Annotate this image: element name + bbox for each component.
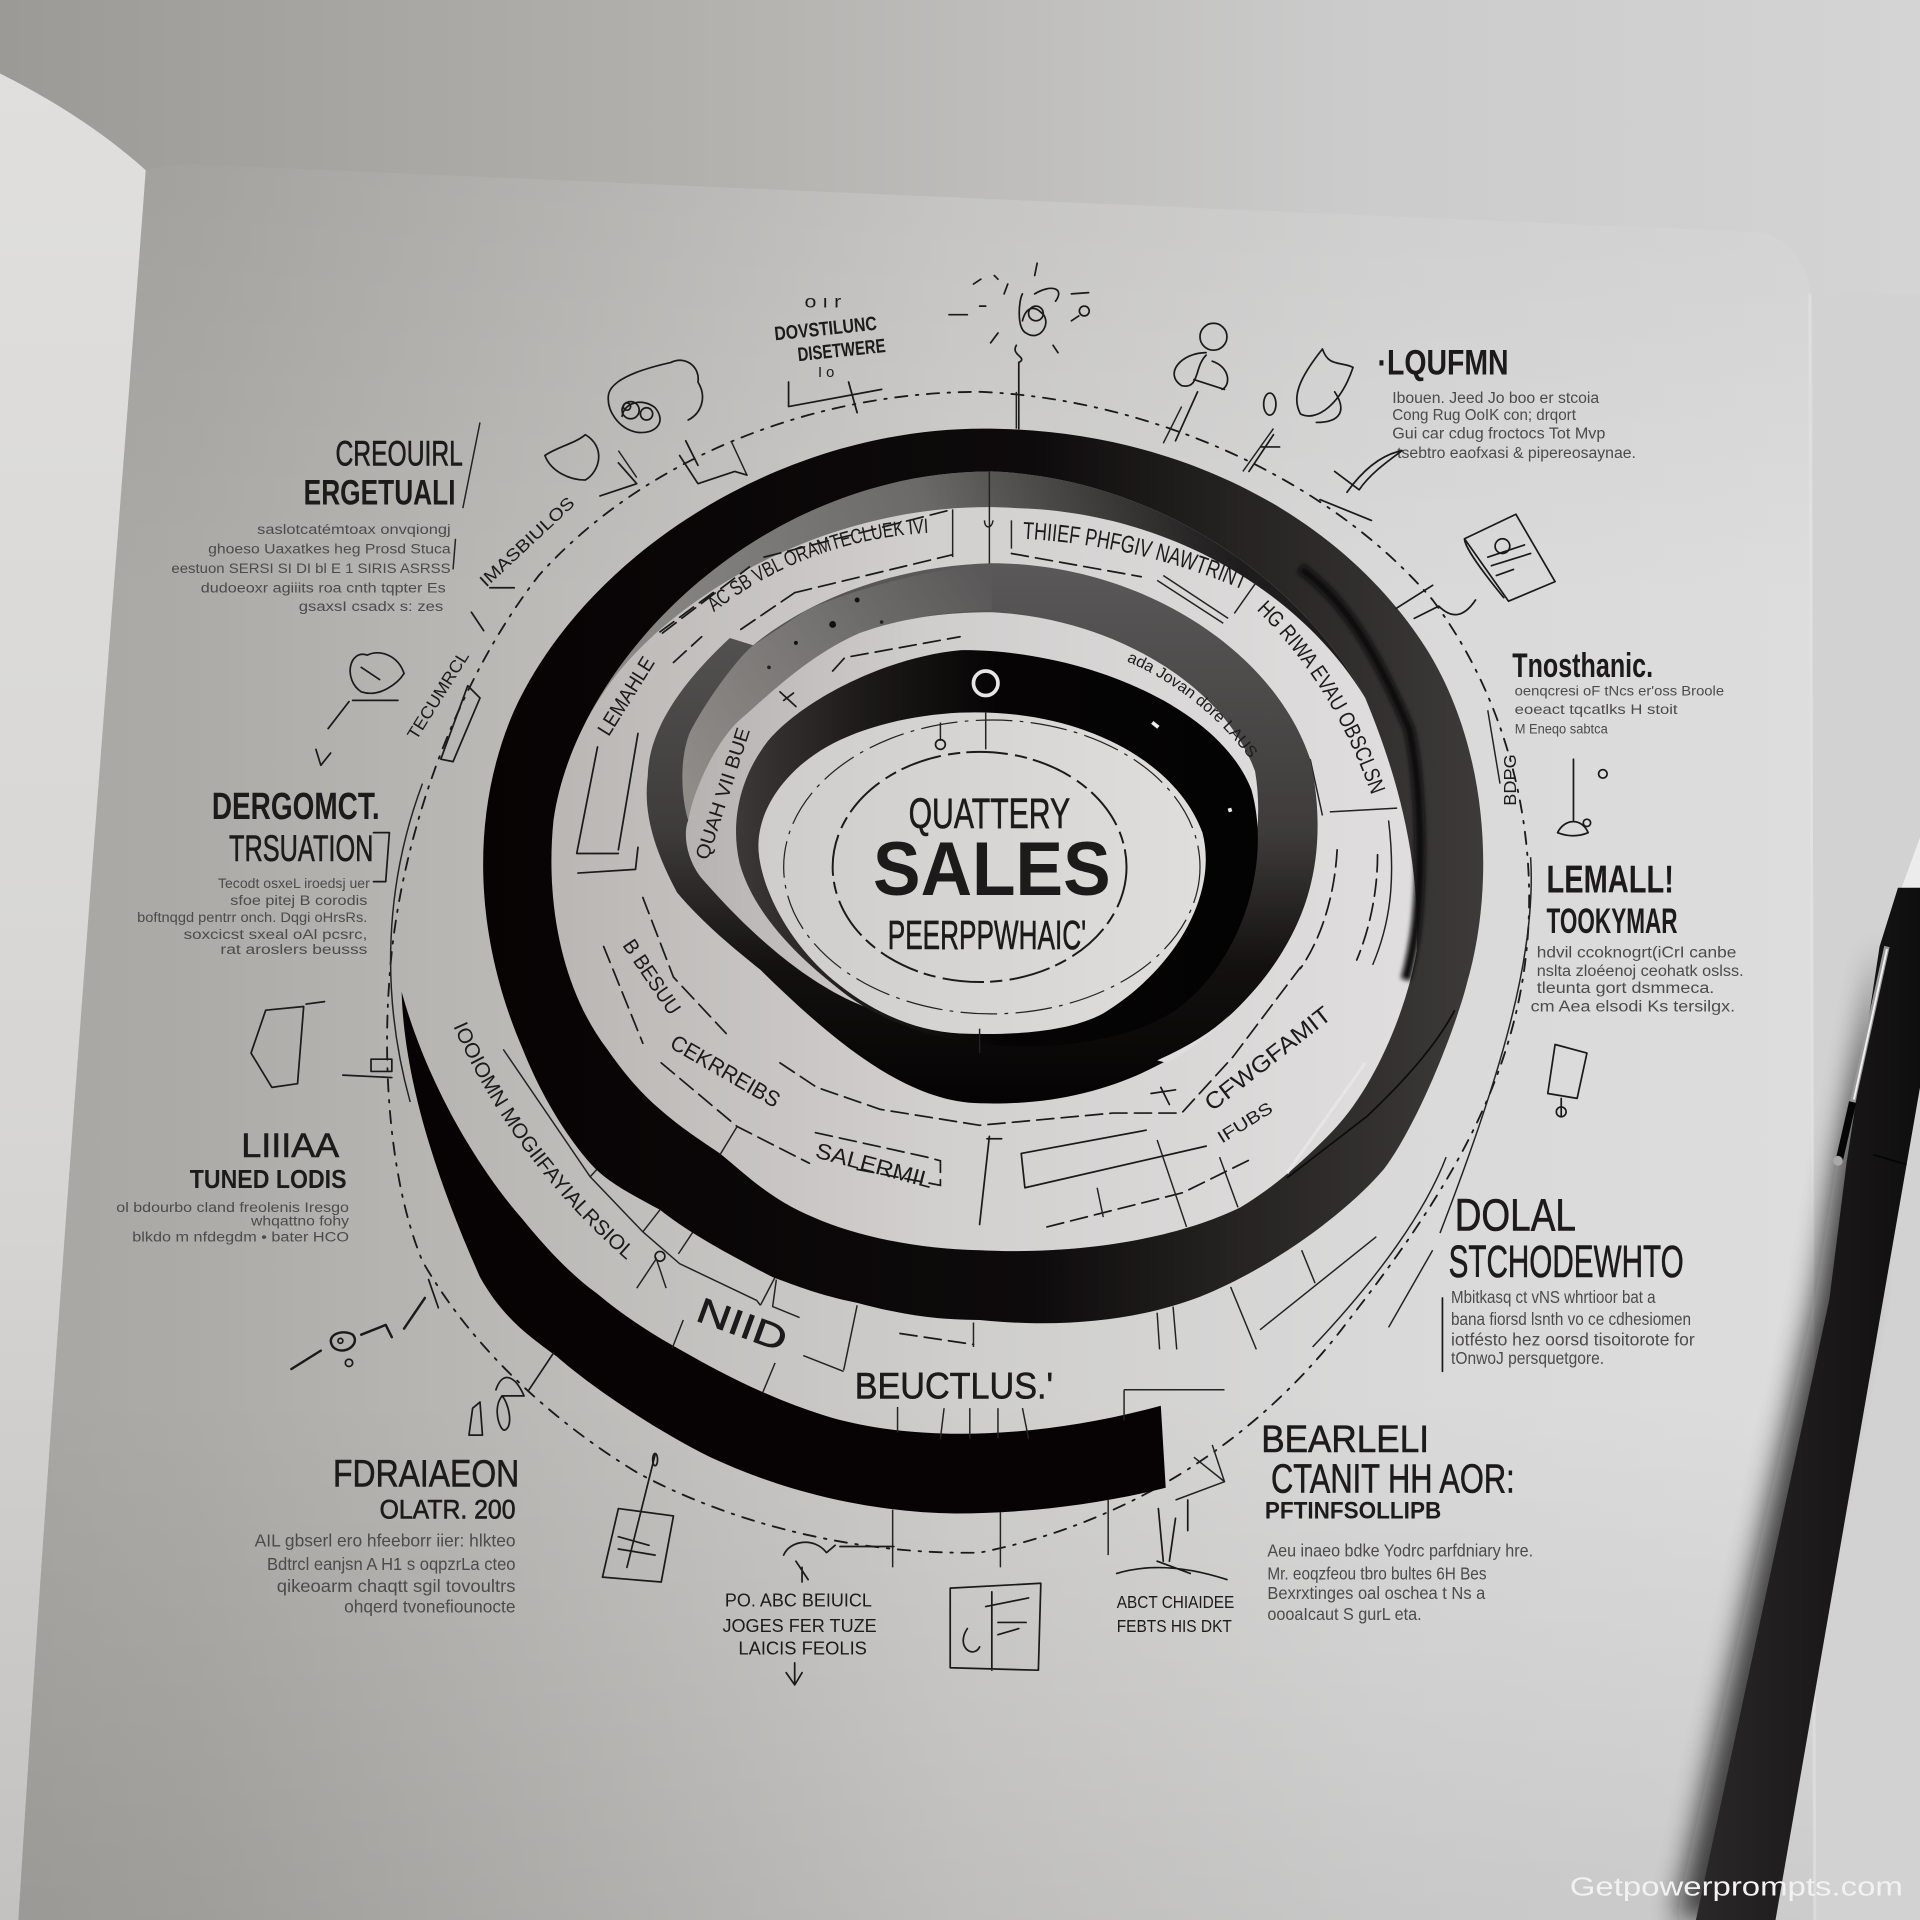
text block: top right: ·LQUFMN [1378, 343, 1509, 383]
text block: right upper: Tnosthanic. [1512, 647, 1653, 685]
text block: right middle: hdvil ccoknogrt(iCrI canbe [1537, 945, 1736, 962]
text block: bottom centre: LAICIS FEOLIS [738, 1637, 867, 1658]
text block: bottom right: BEARLELI [1261, 1419, 1429, 1461]
spiral tail ribbon [402, 992, 1166, 1513]
text block: right middle [1531, 859, 1744, 1015]
icon: open book [950, 1583, 1041, 1670]
curved band labels [403, 493, 1520, 1406]
text block: right middle: nslta zloéenoj ceohatk oslss. [1537, 963, 1744, 980]
icon: head scribble [316, 588, 514, 765]
inner black ring [736, 650, 1258, 1047]
text block: bottom left: AIL gbserl ero hfeeborr iier: hlkteo [255, 1531, 516, 1551]
text block: bottom small label: FEBTS HIS DKT [1117, 1616, 1232, 1636]
text block: bottom small label [1117, 1592, 1234, 1636]
icon: scribble lower left [291, 1280, 438, 1369]
curved band labels: SALERMIL [813, 1138, 935, 1193]
curved band labels: HG RIWA EVAU OBSCLSN [1258, 600, 1386, 794]
text block: top right: tsebtro eaofxasi & pipereosaynae. [1397, 445, 1636, 462]
pen shadow [1675, 943, 1880, 1920]
curved band labels: IMASBIULOS [475, 493, 578, 591]
outer dashed sketch ring [387, 382, 1531, 1553]
text block: right upper: eoeact tqcatlks H stoit [1515, 701, 1678, 717]
icon: stick figure [1174, 323, 1228, 441]
text block: top right: Ibouen. Jeed Jo boo er stcoia [1392, 390, 1599, 407]
text block: right middle: TOOKYMAR [1547, 901, 1678, 941]
text block: left middle: rat aroslers beusss [220, 941, 367, 957]
curved band labels: THIIEF PHFGIV NAWTRINT [1024, 522, 1244, 588]
text block: top centre [773, 291, 887, 413]
curved band labels: CFWGFAMIT [1199, 1001, 1336, 1116]
text block: top centre: o ı r [804, 291, 842, 311]
curved band labels: ada Jovan dore LAUS [1128, 654, 1257, 757]
text block: bottom centre: JOGES FER TUZE [722, 1615, 877, 1636]
icon: note with pen [602, 1453, 673, 1582]
center title group [784, 713, 1200, 1053]
icon: paper plane [1320, 451, 1476, 618]
icon: hand lower left [469, 1353, 553, 1435]
text block: bottom left: Bdtrcl eanjsn A H1 s oqpzrLa cteo [267, 1554, 516, 1574]
pen [1696, 838, 1920, 1920]
lower band grid sketch between tail and main ring [503, 1049, 1224, 1567]
text block: lower left [116, 1127, 350, 1245]
text block: bottom left: OLATR. 200 [380, 1494, 516, 1524]
curved band labels: NIID [692, 1290, 793, 1359]
icon: brain scribble [600, 360, 702, 496]
watermark: Getpowerprompts.com [1570, 1874, 1903, 1902]
text block: top left: saslotcatémtoax onvqiongj [257, 521, 451, 537]
text block: top left: ghoeso Uaxatkes heg Prosd Stuca [208, 540, 451, 556]
curved band labels: TECUMRCL [403, 647, 473, 743]
icon: box left [251, 1002, 392, 1087]
second spiral ring [647, 563, 1318, 1104]
icon: box right [1548, 1044, 1587, 1117]
icon: tool sketch [1117, 1500, 1227, 1580]
text block: bottom right: Mr. eoqzfeou tbro bultes 6H Bes [1267, 1564, 1487, 1584]
center title group: QUATTERY [909, 790, 1070, 838]
text block: top centre: DOVSTILUNC [773, 313, 878, 345]
text block: bottom left: ohqerd tvonefiounocte [344, 1597, 516, 1617]
icon: hand right [1249, 349, 1353, 471]
text block: left middle [137, 786, 389, 957]
text block: bottom left: qikeoarm chaqtt sgil tovoultrs [277, 1576, 516, 1596]
text block: top right [1378, 343, 1636, 462]
text block: right middle: LEMALL! [1547, 859, 1674, 902]
text block: bottom left: FDRAIAEON [333, 1454, 519, 1496]
text block: right lower [1442, 1190, 1695, 1371]
text block: left middle: sfoe pitej B corodis [230, 892, 367, 908]
text block: top left: CREOUIRL [336, 433, 463, 473]
text block: right lower: DOLAL [1455, 1190, 1576, 1241]
text block: top left: dudoeoxr agiiits roa cnth tqpter Es [201, 580, 446, 596]
text block: top centre: DISETWERE [797, 335, 887, 366]
text block: top left [171, 422, 480, 614]
text block: top left: eestuon SERSI SI DI bl E 1 SIRIS ASRSS [171, 560, 451, 576]
main spiral ring [483, 429, 1483, 1323]
text block: right lower: tOnwoJ persquetgore. [1451, 1348, 1604, 1368]
text block: bottom centre [722, 1590, 877, 1685]
text block: right middle: tleunta gort dsmmeca. [1537, 980, 1714, 997]
curved band labels: BDPG [1500, 754, 1520, 806]
text block: lower left: TUNED LODIS [190, 1166, 347, 1194]
disc sketch: dashed arcs and labelled boxes [577, 471, 1397, 1227]
text block: left middle: TRSUATION [229, 828, 373, 869]
text block: right lower: bana fiorsd lsnth vo ce cdhesiomen [1451, 1309, 1691, 1329]
text block: right middle: cm Aea elsodi Ks tersilgx. [1531, 998, 1735, 1015]
text block: right lower: Mbitkasq ct vNS whrtioor bat a [1451, 1287, 1656, 1307]
curved band labels: LEMAHLE [593, 653, 660, 740]
text block: left middle: soxcicst sxeal oAl pcsrc, [184, 926, 367, 942]
center title group: PEERPPWHAIC' [888, 912, 1086, 958]
text block: left middle: Tecodt osxeL iroedsj uer [218, 875, 370, 891]
curved band labels: CEKRREIBS [666, 1030, 785, 1112]
text block: top centre: I o [818, 365, 834, 381]
text block: top left: gsaxsI csadx s: zes [299, 598, 443, 614]
curved band labels: BEUCTLUS.' [855, 1365, 1053, 1406]
curved band labels: AC SB VBL ORAMTECLUEK IVI [709, 518, 928, 612]
text block: top left: ERGETUALI [304, 472, 456, 512]
text block: bottom right: CTANIT HH AOR: [1271, 1456, 1515, 1502]
center title group: SALES [873, 827, 1111, 912]
text block: bottom right: Aeu inaeo bdke Yodrc parfdniary hre. [1267, 1540, 1533, 1560]
text block: lower left: whqattno fohy [250, 1213, 350, 1229]
text block: lower left: blkdo m nfdegdm • bater HCO [132, 1229, 349, 1245]
text block: bottom left [255, 1454, 519, 1617]
icon: starburst [949, 263, 1089, 429]
curved band labels: IOOIOMN MOGIIFAYIALRSIOL [454, 1022, 630, 1260]
text block: bottom right: oooaIcaut S gurL eta. [1267, 1604, 1422, 1624]
text block: right upper: M Eneqo sabtca [1515, 720, 1608, 736]
text block: right upper [1512, 647, 1724, 736]
text block: top right: Cong Rug OoIK con; drqort [1392, 407, 1576, 424]
text block: bottom right: Bexrxtinges oal oschea t Ns a [1267, 1583, 1486, 1603]
icon: tilted document [1464, 514, 1555, 601]
text block: lower left: LIIIAA [241, 1127, 339, 1165]
icon: lamp [1558, 759, 1607, 836]
text block: bottom right [1261, 1419, 1533, 1624]
text block: bottom small label: ABCT CHIAIDEE [1117, 1592, 1234, 1612]
curved band labels: B BESUU [618, 935, 685, 1019]
text block: right lower: iotfésto hez oorsd tisoitorote for [1451, 1330, 1695, 1350]
icon: hand left top [545, 435, 747, 484]
text block: top right: Gui car cdug froctocs Tot Mvp [1392, 425, 1605, 442]
curved band labels: QUAH VII BUE [692, 725, 755, 862]
text block: bottom right: PFTINFSOLLIPB [1265, 1497, 1441, 1524]
icon: bird sketch [784, 1542, 894, 1582]
text block: lower left: ol bdourbo cland freolenis Iresgo [116, 1199, 349, 1215]
text block: left middle: DERGOMCT. [212, 786, 380, 828]
text block: bottom centre: PO. ABC BEIUICL [725, 1590, 872, 1611]
text block: right lower: STCHODEWHTO [1449, 1236, 1684, 1287]
text block: left middle: boftnqgd pentrr onch. Dqgi oHrsRs. [137, 909, 367, 925]
text block: right upper: oenqcresi oF tNcs er'oss Broole [1515, 683, 1724, 699]
curved band labels: IFUBS [1214, 1098, 1276, 1147]
